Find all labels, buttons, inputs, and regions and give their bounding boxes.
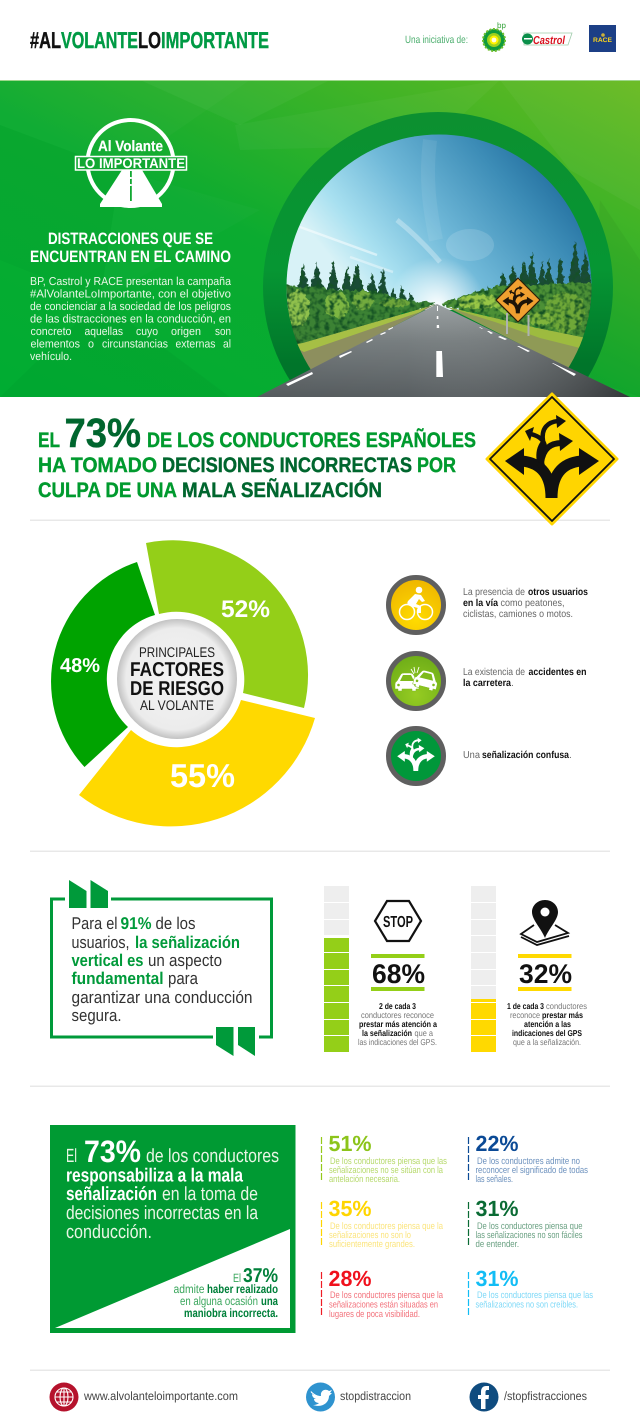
text [463,587,588,620]
quote text: para [168,969,198,988]
stat: 31% cyan: 31% [476,1266,518,1291]
text: como peatones, [500,598,564,609]
hero banner [0,80,640,397]
caption: reconoce [510,1010,540,1020]
headline statistic: 73% [64,410,141,456]
road [257,304,630,397]
text: La existencia de [463,667,525,678]
quote text: Para el [72,914,118,933]
stat: 31% dark green: 31% [476,1196,518,1221]
opening quote marks [69,880,108,908]
caption: las indicaciones del GPS. [358,1037,437,1047]
caption [358,1001,437,1047]
headline statistic: CULPA DE UNA [38,479,177,502]
stat: 22%: las señales. [476,1174,513,1185]
panel text: decisiones incorrectas en la [66,1203,258,1224]
value labels: 55% [170,757,235,794]
twitter handle: stopdistraccion [340,1389,411,1403]
value labels [60,596,270,794]
icon: warning sign [487,394,617,524]
facebook handle: /stopfistracciones [504,1389,587,1403]
text: Una [463,750,480,761]
value: 68% [372,959,425,989]
website: www.alvolanteloimportante.com [83,1389,238,1403]
quote text: vertical es [72,951,144,970]
roadside sign [496,278,540,336]
stat: 51%: 51% [328,1131,372,1156]
stat: 22% [468,1131,588,1185]
icon: fork sign [388,728,444,784]
text: . [569,750,572,761]
stat: 31% dark green: De los conductores piensa que [477,1221,582,1232]
panel text: responsabiliza a la mala [66,1166,243,1186]
right foliage [441,283,596,342]
stat: 28%: 28% [328,1266,372,1291]
panel text: en la toma de [162,1184,258,1205]
text [463,667,586,689]
hero intro text: elementos [30,338,80,350]
stat: 35%: suficientemente grandes. [329,1239,415,1250]
headline statistic: EL [38,429,60,452]
stat: 31% cyan: De los conductores piensa que las [477,1290,593,1301]
chart centre [111,613,243,745]
logo: RACE [589,25,616,52]
risk factor 3 [388,728,572,784]
chart centre: FACTORES [130,659,224,681]
stat: 22%: reconocer el significado de todas [476,1165,588,1176]
stat: 35%: señalizaciones no son lo [329,1230,411,1241]
chart centre: DE RIESGO [130,678,224,700]
hero intro text: son [215,326,231,338]
logo: Castrol [522,33,572,47]
quote text: garantizar una conducción [72,988,252,1007]
campaign hashtag: IMPORTANTE [161,27,269,53]
stat: 35% [322,1196,444,1250]
headline statistic: DE LOS CONDUCTORES ESPAÑOLES [147,428,476,452]
stat: 31% cyan: señalizaciones no son creíbles. [476,1300,578,1310]
quote text: un aspecto [148,951,222,970]
value: 32% [519,959,572,989]
caption: que a [414,1028,433,1038]
text: ciclistas, camiones o motos. [463,609,573,620]
text: otros usuarios [528,587,588,598]
hero intro text: vehículo. [30,351,72,363]
panel text: señalización [66,1184,157,1205]
hero heading [30,232,230,262]
hero intro text: de concienciar a la sociedad de los peligros [30,301,231,313]
hero intro text [30,276,232,363]
headline statistic: MALA SEÑALIZACIÓN [182,478,382,502]
caption: atención a las [524,1019,571,1029]
left foliage [283,285,436,347]
risk factor 1 [388,578,588,632]
icon: stop sign [375,901,421,941]
stat: 28% [322,1266,444,1320]
stat: 51%: señalizaciones no se sitúan con la [329,1165,444,1176]
road logo: LO IMPORTANTE [77,155,185,171]
segment: 55% [79,700,315,826]
panel text: conducción. [66,1222,152,1243]
hero heading: DISTRACCIONES QUE SE [48,230,213,248]
closing quote marks [216,1027,255,1056]
headline statistic [38,410,476,502]
stat: 28%: señalizaciones están situadas en [329,1300,438,1310]
donut chart: risk factors [51,540,315,826]
footer [50,1382,587,1412]
campaign hashtag: #AL [30,27,61,53]
road logo: Al Volante [98,138,163,155]
hero intro text: BP, Castrol y RACE presentan la campaña [30,276,232,288]
segment: 48% [51,562,155,767]
stat: 51%: De los conductores piensa que las [330,1156,447,1167]
text: señalización confusa [482,750,569,761]
bar gauge [324,886,349,1052]
caption: que a la señalización. [513,1037,581,1047]
stat: 28%: De los conductores piensa que la [330,1290,444,1301]
value labels: 48% [60,655,100,677]
stat: 35%: De los conductores piensa que la [330,1221,444,1232]
caption: prestar más [542,1010,583,1020]
quote text: 91% [120,914,152,933]
quote text: de los [156,914,196,933]
callout: 37%: en alguna ocasión [180,1294,258,1308]
road logo [76,120,186,207]
callout: 37%: admite [174,1282,205,1296]
quote text [72,914,252,1025]
callout: 37%: 37% [243,1265,278,1287]
icon: facebook [470,1382,498,1412]
hero intro text: aquellas [84,326,123,338]
caption: 1 de cada 3 [507,1001,544,1011]
logo: Castrol: Castrol [533,35,566,47]
gauge 32% [471,886,587,1052]
stat: 28%: lugares de poca visibilidad. [329,1309,420,1320]
logo: bp [483,21,506,51]
arch ring [263,112,613,380]
headline statistic: HA TOMADO [38,454,157,477]
conifers [295,242,596,310]
campaign hashtag: LO [138,27,161,53]
quote text: usuarios, [72,933,130,952]
icon: globe [50,1382,78,1412]
caption: indicaciones del GPS [512,1028,582,1038]
hero intro text: o [88,338,94,350]
quote text: la señalización [135,933,240,952]
initiative label: Una iniciativa de: [405,34,468,46]
caption: la señalización [362,1028,412,1038]
hero intro text: circunstancias [102,338,168,350]
text: . [511,678,514,689]
hero intro text: cuyo [136,326,158,338]
panel text: 73% [84,1134,141,1169]
stat: 51%: antelación necesaria. [329,1174,400,1185]
sky [280,130,600,310]
text: en la vía [463,598,498,609]
stat: 35%: 35% [328,1196,372,1221]
stat: 22%: De los conductores admite no [477,1156,580,1167]
callout: 37%: haber realizado [207,1282,278,1296]
green panel: 73% [50,1125,296,1333]
headline statistic: POR [417,454,456,477]
callout: 37% [174,1265,278,1320]
icon: cyclist [388,578,444,632]
verges [298,304,436,370]
risk factor 2 [388,654,586,708]
campaign hashtag [30,27,269,53]
hero heading: ENCUENTRAN EN EL CAMINO [30,248,231,266]
text: accidentes en [528,667,586,678]
caption: 2 de cada 3 [379,1001,416,1011]
value labels: 52% [221,596,270,623]
text: La presencia de [463,587,525,598]
hero intro text: externas [176,338,216,350]
road photo [257,130,630,397]
header [30,21,616,53]
stat: 31% dark green: las señalizaciones no son fáciles [476,1230,583,1241]
hero intro text: concreto [30,326,72,338]
icon: GPS pin [521,900,569,945]
bar gauge [471,886,496,1052]
icon: stop sign: STOP [383,914,413,931]
quote text: fundamental [72,969,164,988]
stat: 22%: 22% [476,1131,518,1156]
quote text: segura. [72,1006,122,1025]
callout: 37%: El [233,1271,241,1285]
gauge 68% [324,886,437,1052]
text: la carretera [463,678,511,689]
icon: crash [388,654,444,708]
caption: conductores [546,1001,587,1011]
logo: RACE: RACE [593,37,613,44]
panel text [66,1134,279,1243]
hero intro text: #AlVolanteLoImportante, con el objetivo [30,288,231,300]
callout: 37%: maniobra incorrecta. [184,1306,278,1320]
panel text: de los conductores [146,1146,279,1167]
panel text: El [66,1146,77,1167]
segment: 52% [146,540,308,708]
hero intro text: origen [171,326,201,338]
quote box [52,880,272,1056]
campaign hashtag: VOLANTE [61,27,138,53]
hero intro text: al [223,338,231,350]
hero intro text: de las distracciones en la conducción, en [30,314,231,326]
headline statistic: DECISIONES INCORRECTAS [162,454,412,477]
icon: twitter [306,1382,335,1412]
road markings [286,306,576,386]
chart centre: PRINCIPALES [139,644,215,660]
caption: conductores reconoce [361,1010,434,1020]
chart centre: AL VOLANTE [140,697,214,713]
stat: 51% [322,1131,447,1185]
stat: 31% cyan [468,1266,593,1316]
stat: 31% dark green: de entender. [476,1239,519,1250]
callout: 37%: una [261,1294,278,1308]
caption [507,1001,587,1047]
stat: 31% dark green [468,1196,583,1250]
caption: prestar más atención a [359,1019,437,1029]
logo: bp: bp [497,21,506,30]
